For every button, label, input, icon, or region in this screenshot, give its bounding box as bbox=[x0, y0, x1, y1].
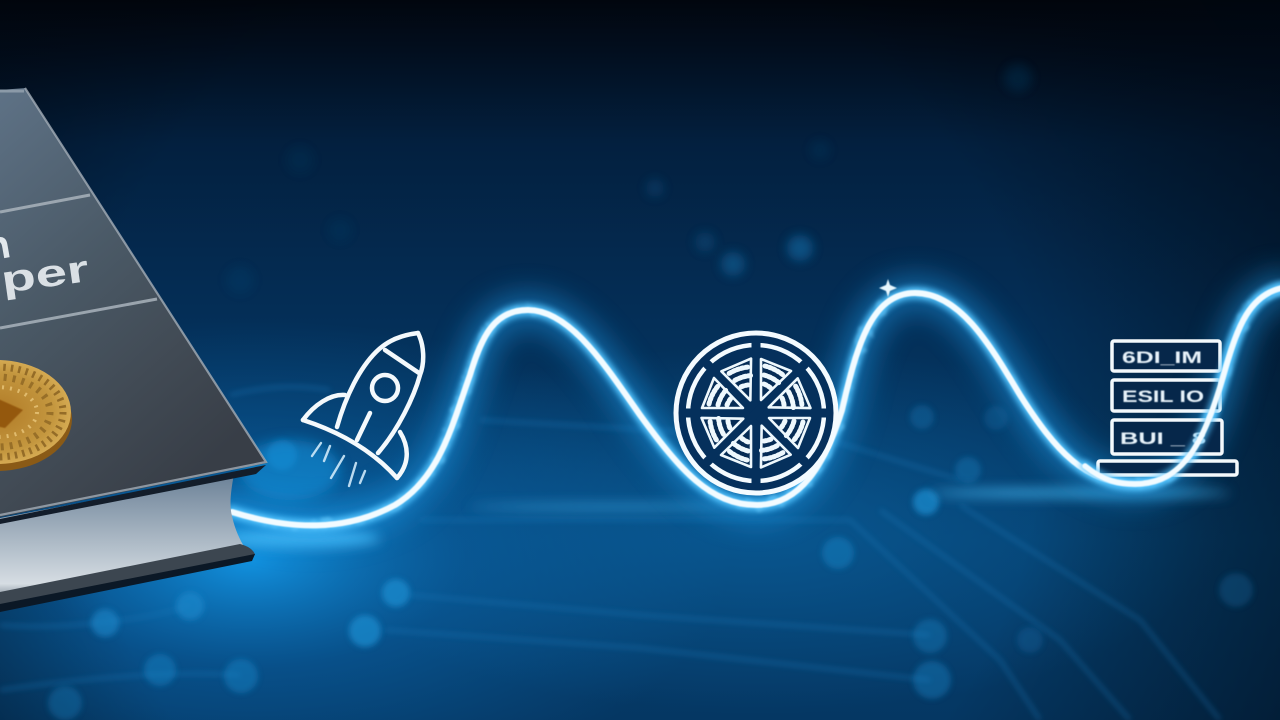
page block bbox=[0, 474, 245, 596]
faint upper bokeh dots bbox=[226, 64, 1032, 294]
book bbox=[0, 88, 267, 612]
sparkle bbox=[879, 279, 897, 297]
circuit traces bbox=[0, 387, 1220, 720]
server base bbox=[1098, 461, 1237, 475]
cover text: per bbox=[0, 248, 92, 302]
front cover bbox=[0, 88, 267, 517]
glowing wave bbox=[232, 288, 1280, 525]
wave overlay across server bbox=[1085, 288, 1280, 484]
server row 3: BUI _ 8 bbox=[1120, 429, 1206, 448]
back cover bbox=[0, 544, 255, 606]
horizontal light streaks bbox=[220, 440, 1230, 547]
icon: server stack bbox=[1098, 341, 1237, 475]
icon: pizza bbox=[676, 333, 836, 493]
icon: rocket bbox=[303, 333, 423, 486]
cover edge highlights bbox=[0, 88, 266, 515]
cover dividers bbox=[0, 195, 90, 212]
cover text bbox=[0, 222, 92, 302]
gold coin bbox=[0, 360, 72, 471]
server row 2: ESIL IO bbox=[1122, 387, 1204, 406]
circuit nodes bbox=[48, 405, 1253, 720]
server row 1: 6DI_IM bbox=[1122, 348, 1202, 367]
